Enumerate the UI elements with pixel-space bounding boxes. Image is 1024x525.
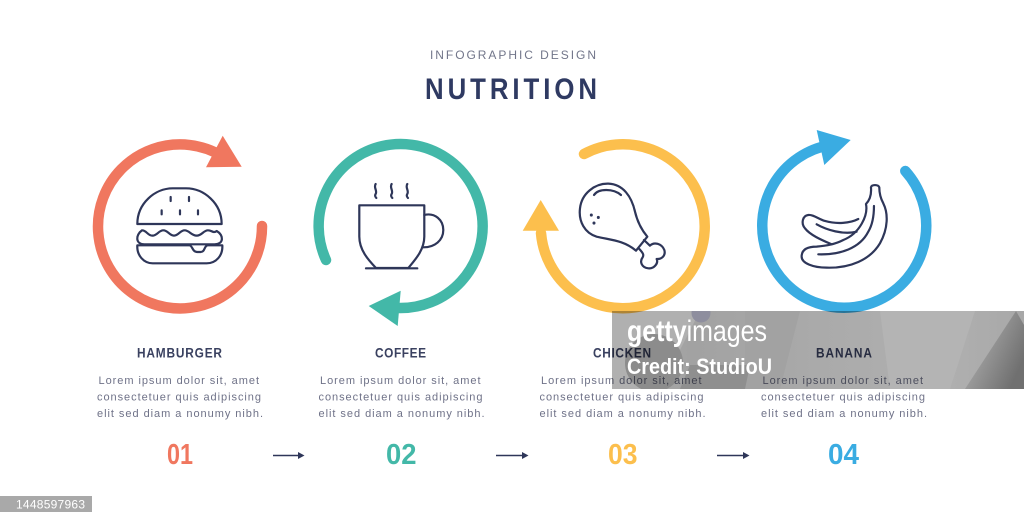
column 2 text: elit sed diam a nonumy nibh. — [318, 408, 484, 420]
column 1 text: elit sed diam a nonumy nibh. — [97, 408, 263, 420]
column 2 text — [318, 345, 484, 471]
arrow 2 to 3 — [496, 452, 528, 459]
column 4 text: 04 — [828, 439, 859, 471]
column 3 text: elit sed diam a nonumy nibh. — [540, 408, 706, 420]
column 3 text: CHICKEN — [593, 345, 651, 361]
title: NUTRITION — [425, 72, 597, 105]
column 3 text: Lorem ipsum dolor sit, amet — [541, 375, 702, 387]
subtitle: INFOGRAPHIC DESIGN — [430, 48, 596, 62]
column 3 text: consectetuer quis adipiscing — [540, 392, 704, 404]
column 1 text: 01 — [167, 439, 193, 471]
column 3 text: 03 — [608, 439, 638, 471]
step 2: coffee ring — [319, 144, 483, 326]
arrow 3 to 4 — [717, 452, 750, 459]
column 1 text — [97, 345, 263, 471]
column 3 text — [540, 345, 706, 471]
column 1 text: consectetuer quis adipiscing — [97, 392, 261, 404]
watermark credit: Credit: StudioU — [627, 354, 772, 379]
step 1: hamburger ring — [98, 136, 262, 308]
image id tag: 1448597963 — [16, 498, 85, 512]
image id tag — [0, 496, 92, 512]
icon: chicken leg — [580, 184, 665, 268]
arrow 1 to 2 — [273, 452, 304, 459]
column 4 text: Lorem ipsum dolor sit, amet — [762, 375, 923, 387]
column 1 text: HAMBURGER — [137, 345, 222, 361]
column 4 text: BANANA — [816, 345, 872, 361]
icon: coffee cup — [359, 184, 443, 268]
icon: hamburger — [137, 188, 222, 263]
step 4: banana ring — [762, 130, 926, 308]
column 2 text: 02 — [386, 439, 416, 471]
column 2 text: COFFEE — [375, 345, 426, 361]
column 1 text: Lorem ipsum dolor sit, amet — [98, 375, 259, 387]
column 4 text — [761, 345, 927, 471]
column 4 text: consectetuer quis adipiscing — [761, 392, 925, 404]
column 4 text: elit sed diam a nonumy nibh. — [761, 408, 927, 420]
watermark panel — [612, 311, 1024, 389]
watermark logo text: gettyimages — [627, 315, 767, 348]
column 2 text: Lorem ipsum dolor sit, amet — [320, 375, 480, 387]
step 3: chicken ring — [523, 144, 705, 308]
icon: banana — [802, 185, 887, 268]
column 2 text: consectetuer quis adipiscing — [318, 392, 482, 404]
